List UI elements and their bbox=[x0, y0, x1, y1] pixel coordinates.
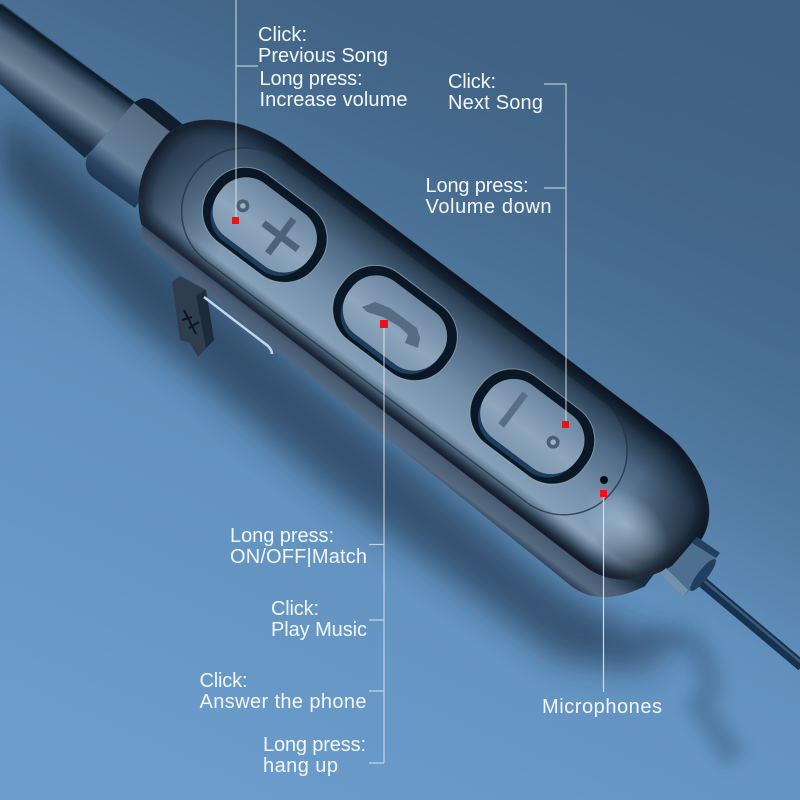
remote body bbox=[138, 120, 710, 598]
cable connector bbox=[86, 98, 192, 208]
plus glyph bbox=[251, 206, 311, 266]
end highlight bbox=[569, 471, 682, 577]
label: click play music: Play Music bbox=[271, 619, 367, 641]
microphone hole bbox=[600, 476, 608, 484]
label: click previous song: Previous Song bbox=[258, 45, 388, 67]
shadow under earphone bbox=[0, 110, 735, 760]
metal edge bbox=[204, 297, 272, 354]
label: click next song: Click: bbox=[448, 71, 496, 93]
red marker: minus button bbox=[562, 421, 569, 428]
red marker: phone button bbox=[380, 320, 388, 328]
label: long press hang up: hang up bbox=[263, 755, 338, 777]
recessed plate bbox=[157, 123, 652, 540]
label: click play music bbox=[271, 598, 367, 641]
red marker: microphone bbox=[600, 490, 607, 497]
label: long press on off match: Long press: bbox=[230, 525, 334, 547]
label: click answer the phone: Click: bbox=[200, 670, 248, 692]
face end shading bbox=[110, 84, 740, 613]
phone button bbox=[317, 250, 473, 396]
label: long press on off match: ON/OFF|Match bbox=[230, 546, 367, 568]
USB symbol bbox=[182, 310, 199, 334]
label: click answer the phone bbox=[200, 670, 366, 713]
red marker: plus button bbox=[232, 217, 239, 224]
label: long press on off match bbox=[230, 525, 367, 568]
label: long press volume down: Long press: bbox=[426, 175, 528, 197]
label: click next song: Next Song bbox=[448, 92, 543, 114]
label: click play music: Click: bbox=[271, 598, 319, 620]
label: click answer the phone: Answer the phone bbox=[200, 691, 366, 713]
plus button bbox=[187, 152, 343, 298]
label: click next song bbox=[448, 71, 543, 114]
label: long press hang up bbox=[263, 734, 366, 777]
handset glyph bbox=[362, 302, 420, 348]
label: long press increase volume: Increase volume bbox=[260, 89, 408, 111]
dark face rim bbox=[138, 120, 710, 580]
label: long press increase volume bbox=[260, 68, 408, 111]
indicator dot bbox=[234, 197, 252, 215]
label: microphones: Microphones bbox=[542, 696, 662, 718]
minus button bbox=[454, 353, 610, 500]
minus glyph bbox=[498, 391, 528, 428]
cable collar bbox=[660, 537, 720, 597]
label: click previous song: Click: bbox=[258, 24, 307, 46]
body side wall bbox=[109, 154, 681, 622]
neck cable bbox=[0, 4, 135, 158]
body top face bbox=[110, 84, 740, 613]
leader lines bbox=[236, 0, 604, 763]
label: click previous song bbox=[258, 24, 388, 67]
label: long press hang up: Long press: bbox=[263, 734, 366, 756]
output cable bbox=[694, 574, 800, 666]
label: long press volume down: Volume down bbox=[426, 196, 552, 218]
label: long press increase volume: Long press: bbox=[260, 68, 362, 90]
indicator dot bbox=[544, 433, 562, 451]
USB clip bbox=[172, 276, 272, 357]
label: long press volume down bbox=[426, 175, 552, 218]
